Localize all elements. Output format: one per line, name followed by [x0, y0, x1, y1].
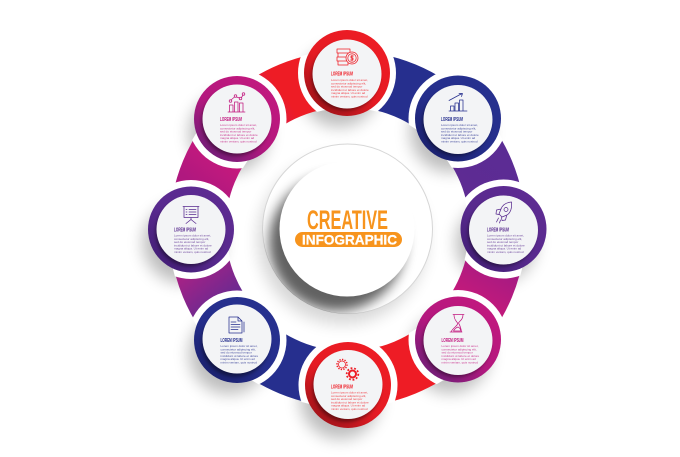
- icon: hourglass: [450, 314, 464, 332]
- ring of arc segments: [197, 79, 497, 379]
- center shadow: [269, 175, 405, 311]
- paragraph: Lorem ipsum dolor sit amet,: [220, 123, 257, 127]
- heading: LOREM IPSUM: [442, 338, 464, 344]
- center disc: [280, 162, 414, 296]
- paragraph: incididunt ut labore et dolore: [331, 400, 369, 404]
- heading: LOREM IPSUM: [174, 228, 196, 234]
- node shadows: [143, 47, 536, 439]
- paragraph: Lorem ipsum dolor sit amet,: [441, 123, 478, 127]
- heading: LOREM IPSUM: [331, 384, 353, 390]
- paragraph: Lorem ipsum dolor sit amet,: [487, 234, 524, 238]
- node: top-left magenta bar chart: [194, 76, 280, 162]
- paragraph: sed do eiusmod tempor: [174, 240, 205, 244]
- paragraph: magna aliqua. Ut enim ad: [331, 91, 366, 95]
- paragraph: incididunt ut labore et dolore: [487, 243, 525, 247]
- heading: LOREM IPSUM: [331, 72, 353, 78]
- icon: rocket: [496, 202, 512, 223]
- paragraph: consectetur adipiscing elit,: [487, 237, 522, 241]
- arc segment: purple left-lower: [197, 229, 241, 335]
- node: bottom-right magenta hourglass: [415, 296, 501, 382]
- paragraph: magna aliqua. Ut enim ad: [174, 247, 209, 251]
- arc segment: navy top-right: [348, 79, 454, 123]
- paragraph: incididunt ut labore et dolore: [220, 354, 259, 358]
- paragraph: sed do eiusmod tempor: [220, 130, 251, 134]
- paragraph: sed do eiusmod tempor: [331, 397, 362, 401]
- arc segment: magenta right-lower: [454, 229, 498, 335]
- paragraph: consectetur adipiscing elit,: [441, 126, 476, 130]
- paragraph: Lorem ipsum dolor sit amet,: [331, 390, 368, 394]
- paragraph: minim veniam, quis nostrud: [220, 360, 257, 364]
- paragraph: minim veniam, quis nostrud: [331, 407, 368, 411]
- icon: document: [229, 317, 244, 333]
- node: bottom-left navy document: [194, 297, 280, 383]
- paragraph: consectetur adipiscing elit,: [442, 347, 477, 351]
- paragraph: incididunt ut labore et dolore: [441, 133, 479, 137]
- paragraph: consectetur adipiscing elit,: [174, 237, 209, 241]
- paragraph: minim veniam, quis nostrud: [487, 250, 524, 254]
- arc segment: red bottom-right: [348, 335, 454, 379]
- heading: LOREM IPSUM: [220, 338, 242, 344]
- paragraph: incididunt ut labore et dolore: [442, 354, 480, 358]
- icon: coins: [337, 49, 358, 65]
- paragraph: sed do eiusmod tempor: [331, 85, 362, 89]
- paragraph: magna aliqua. Ut enim ad: [331, 404, 366, 408]
- paragraph: sed do eiusmod tempor: [220, 351, 252, 355]
- icon: gears: [337, 360, 358, 380]
- arc segment: navy bottom-left: [241, 335, 348, 379]
- arc segment: magenta left-upper: [197, 123, 241, 229]
- icon: presentation board: [183, 206, 199, 224]
- paragraph: minim veniam, quis nostrud: [331, 94, 368, 98]
- paragraph: sed do eiusmod tempor: [441, 130, 472, 134]
- paragraph: incididunt ut labore et dolore: [220, 133, 258, 137]
- paragraph: magna aliqua. Ut enim ad: [441, 136, 476, 140]
- paragraph: sed do eiusmod tempor: [442, 351, 473, 355]
- paragraph: incididunt ut labore et dolore: [331, 88, 369, 92]
- heading: LOREM IPSUM: [441, 117, 463, 123]
- title pill: infographic: INFOGRAPHIC: [302, 232, 397, 248]
- node: top red coins: [304, 30, 390, 116]
- paragraph: Lorem ipsum dolor sit amet,: [442, 344, 479, 348]
- paragraph: magna aliqua. Ut enim ad: [442, 357, 476, 361]
- paragraph: incididunt ut labore et dolore: [174, 243, 212, 247]
- arc segment: purple right-upper: [454, 123, 498, 229]
- paragraph: consectetur adipiscing elit,: [220, 347, 256, 351]
- node: right purple rocket: [460, 186, 546, 272]
- paragraph: Lorem ipsum dolor sit amet,: [331, 78, 368, 82]
- paragraph: consectetur adipiscing elit,: [220, 126, 255, 130]
- paragraph: minim veniam, quis nostrud: [441, 140, 478, 144]
- paragraph: magna aliqua. Ut enim ad: [487, 247, 522, 251]
- node gaps cut into the ring: [173, 54, 522, 404]
- paragraph: minim veniam, quis nostrud: [220, 140, 257, 144]
- paragraph: magna aliqua. Ut enim ad: [220, 136, 255, 140]
- icon: bar chart with line: [228, 93, 245, 112]
- heading: LOREM IPSUM: [220, 117, 242, 123]
- node: left purple presentation board: [148, 186, 234, 272]
- arc segment: red top-left: [241, 79, 348, 123]
- paragraph: Lorem ipsum dolor sit amet,: [174, 234, 211, 238]
- paragraph: minim veniam, quis nostrud: [442, 360, 478, 364]
- node: bottom red gears: [305, 342, 391, 428]
- paragraph: consectetur adipiscing elit,: [331, 81, 366, 85]
- paragraph: minim veniam, quis nostrud: [174, 250, 211, 254]
- heading: LOREM IPSUM: [487, 228, 509, 234]
- paragraph: sed do eiusmod tempor: [487, 240, 518, 244]
- center plate: [258, 144, 432, 324]
- icon: growth chart: [449, 94, 467, 111]
- title: creative: CREATIVE: [307, 205, 388, 235]
- paragraph: Lorem ipsum dolor sit amet,: [220, 344, 258, 348]
- paragraph: consectetur adipiscing elit,: [331, 394, 366, 398]
- paragraph: magna aliqua. Ut enim ad: [220, 357, 255, 361]
- node: top-right navy growth chart: [415, 76, 501, 162]
